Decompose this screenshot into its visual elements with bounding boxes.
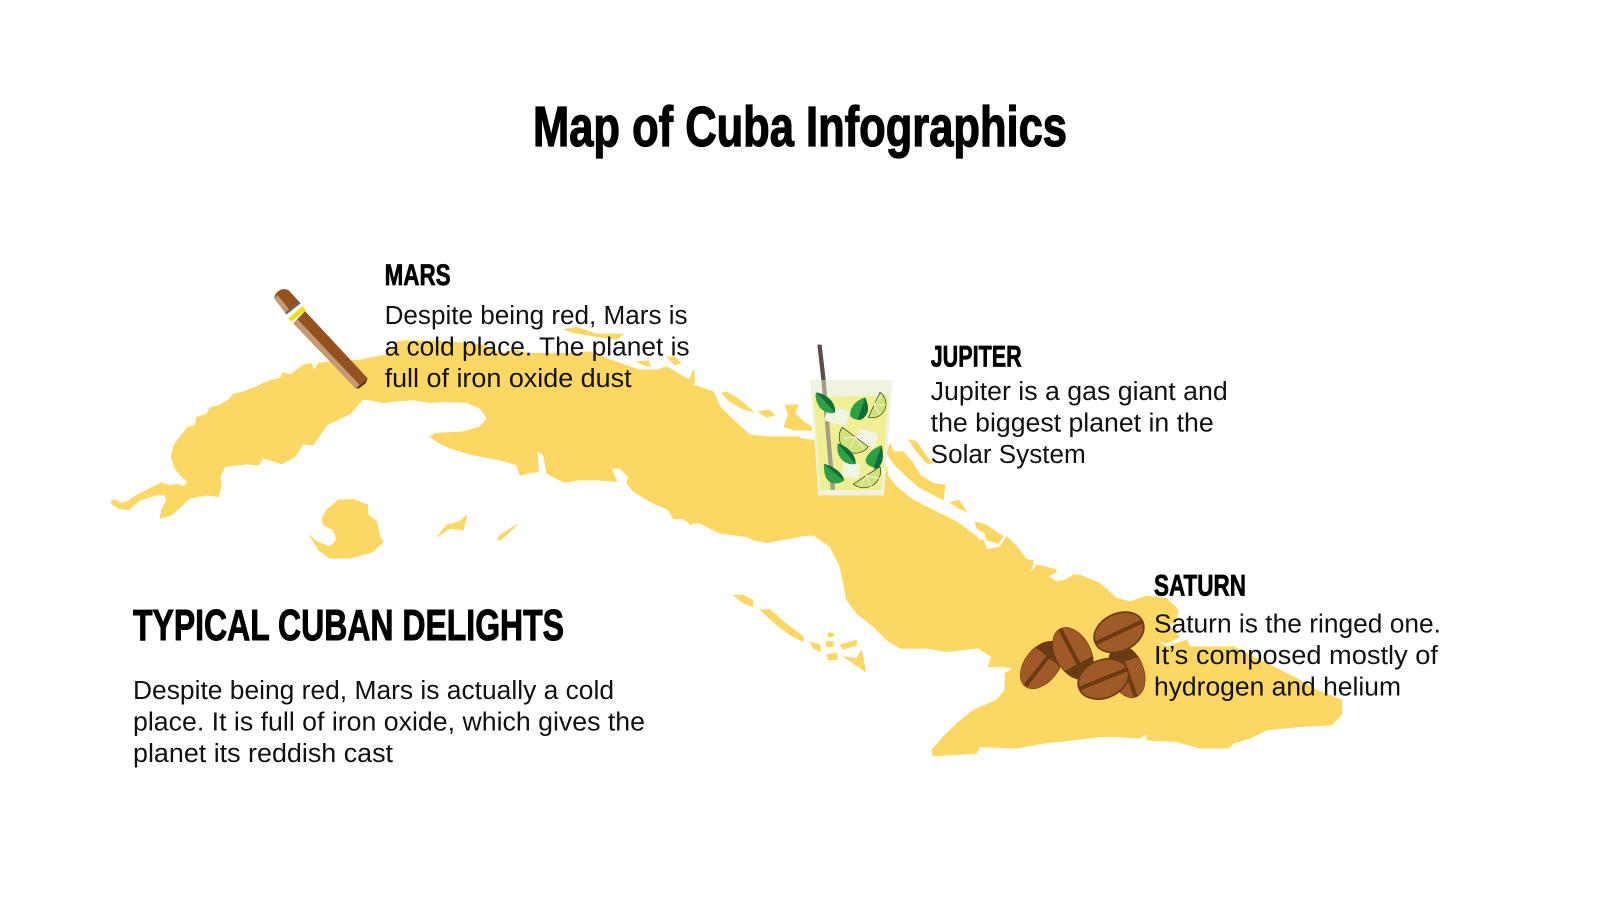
text: Saturn description: Saturn is the ringed one. xyxy=(1154,611,1441,639)
text: Jupiter description xyxy=(931,378,1228,469)
heading: Saturn: SATURN xyxy=(1154,570,1246,603)
bean: top right xyxy=(1088,604,1150,660)
lime slices xyxy=(839,392,886,488)
text: Saturn description: It’s composed mostly of xyxy=(1154,642,1439,670)
text: Jupiter description: the biggest planet in the xyxy=(931,410,1214,438)
text: Mars description: full of iron oxide dust xyxy=(385,365,632,393)
title: Map of Cuba Infographics xyxy=(533,95,1067,159)
central Cuba and keys xyxy=(680,370,1080,672)
drink xyxy=(813,395,888,490)
heading: Mars: MARS xyxy=(385,259,451,292)
text: Saturn description: hydrogen and helium xyxy=(1154,674,1401,702)
icon: mojito glass xyxy=(810,345,892,495)
glass xyxy=(810,380,892,495)
text: Mars description: Despite being red, Mars is xyxy=(385,302,688,330)
eastern Cuba xyxy=(900,540,1342,756)
text: delights description: place. It is full of iron oxide, which gives the xyxy=(133,708,645,736)
bean: left xyxy=(1012,634,1071,697)
icon: coffee beans xyxy=(1012,604,1152,706)
text: Jupiter description: Jupiter is a gas giant and xyxy=(931,378,1228,406)
icon: cigar xyxy=(274,289,368,388)
heading: typical Cuban delights: TYPICAL CUBAN DELIGHTS xyxy=(133,601,564,650)
text: Jupiter description: Solar System xyxy=(931,441,1086,469)
straw top xyxy=(817,345,826,380)
text: Saturn description xyxy=(1154,611,1441,702)
bean: front xyxy=(1072,652,1135,706)
text: delights description xyxy=(133,677,645,768)
ice cubes xyxy=(824,406,878,479)
west-central Cuba xyxy=(397,327,800,543)
map of Cuba xyxy=(111,327,1342,756)
text: delights description: Despite being red, Mars is actually a cold xyxy=(133,677,614,705)
text: Mars description xyxy=(385,302,690,393)
heading: Jupiter: JUPITER xyxy=(931,341,1022,374)
text: delights description: planet its reddish cast xyxy=(133,740,393,768)
western Cuba and Isla de la Juventud xyxy=(111,340,407,558)
bean: back xyxy=(1045,621,1101,686)
text: Mars description: a cold place. The planet is xyxy=(385,334,690,362)
mint leaves xyxy=(816,392,883,484)
straw in glass xyxy=(821,380,835,490)
bean: right back xyxy=(1102,641,1152,703)
